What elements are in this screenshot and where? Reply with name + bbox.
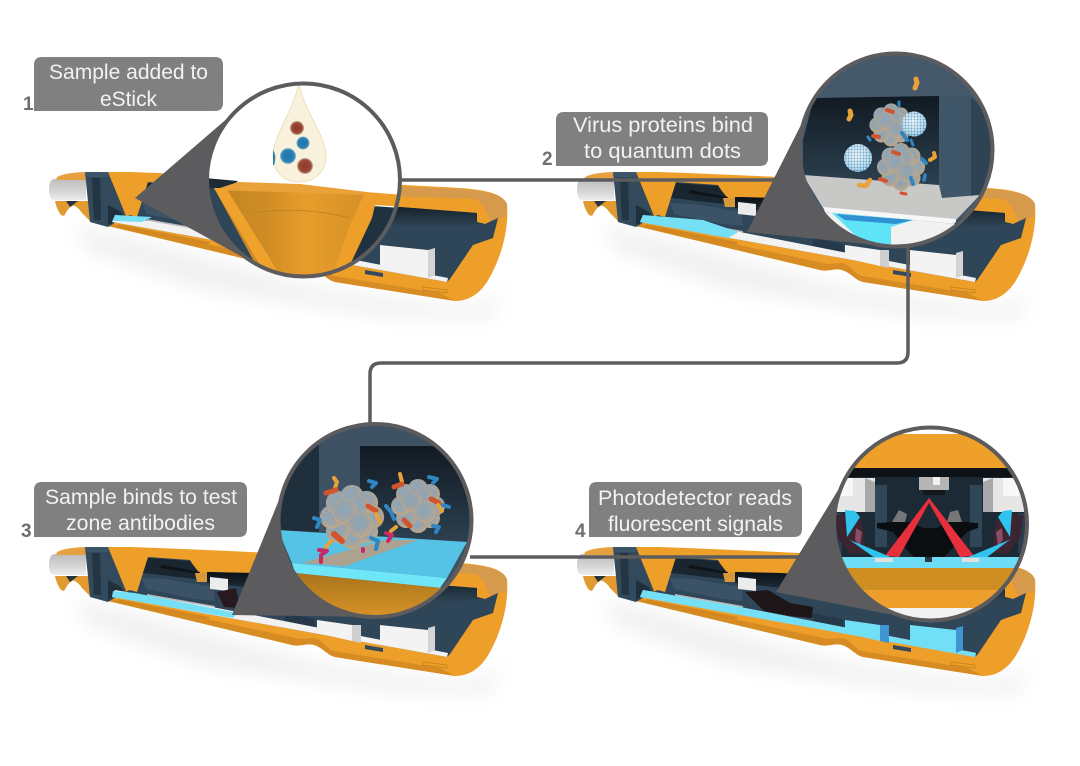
central optics — [877, 522, 978, 558]
step number 1: 1 — [23, 94, 34, 115]
magnifier wedge 1 — [135, 107, 257, 265]
panel: step 2 device — [577, 172, 1048, 320]
test strip blue section 2 — [640, 215, 738, 238]
test strip blue section 3 — [112, 591, 237, 618]
label: step 3 — [34, 482, 247, 537]
white blocks 2 — [845, 245, 963, 278]
white block 1 — [380, 245, 435, 278]
connector lines between steps — [370, 180, 908, 557]
test strip blue section 4 — [640, 590, 976, 657]
magnifier 2: proteins bind quantum dots — [796, 50, 996, 250]
panel: step 4 device — [577, 547, 1048, 695]
blue excitation beams — [845, 510, 1012, 558]
virus clusters — [869, 103, 913, 147]
pathogen particles — [273, 121, 313, 174]
device cutaway 1 — [49, 172, 520, 320]
red fluorescence beams — [885, 498, 974, 557]
label: step 4 — [589, 482, 802, 537]
label: step 4: fluorescent signals — [608, 513, 783, 536]
antibodies — [314, 474, 449, 562]
side emitters — [833, 478, 1024, 512]
blue blocks 4 — [845, 620, 963, 653]
magnifier 4: photodetector optics — [830, 426, 1030, 626]
label: step 3: Sample binds to test — [45, 486, 237, 509]
magnifier wedge 2 — [747, 107, 887, 246]
white blocks 3 — [317, 620, 435, 653]
detector — [919, 477, 949, 495]
label: step 4: Photodetector reads — [598, 487, 792, 510]
device cutaway 4 — [577, 547, 1048, 695]
label: step 1: eStick — [100, 88, 157, 111]
device cutaway 3 — [49, 547, 520, 695]
magnifier wedge 3 — [232, 484, 374, 617]
step number 2: 2 — [542, 149, 553, 170]
magnifier wedge 4 — [776, 474, 912, 619]
label: step 2: Virus proteins bind — [573, 114, 753, 137]
reagent clump 3 — [217, 588, 240, 608]
step number 4: 4 — [575, 521, 586, 542]
label: step 3: zone antibodies — [66, 512, 215, 535]
step number 3: 3 — [21, 521, 32, 542]
device cutaway 2 — [577, 172, 1048, 320]
test strip blue section 1 — [113, 215, 152, 222]
magnifier 1: drop over funnel — [205, 80, 405, 282]
free and bound proteins — [849, 79, 935, 194]
panel: step 1 device — [49, 172, 520, 320]
label: step 1 — [34, 57, 223, 111]
magnifier 3: binding to test zone antibodies — [278, 423, 473, 622]
label: step 1: Sample added to — [49, 61, 208, 84]
label: step 2: to quantum dots — [584, 140, 741, 163]
maroon reagent — [835, 512, 1023, 554]
panel: step 3 device — [49, 547, 520, 695]
quantum dots — [844, 112, 926, 172]
virus clusters — [391, 479, 445, 533]
label: step 2 — [556, 112, 768, 166]
reagent clump 4 — [745, 590, 813, 618]
liquid drop — [273, 80, 326, 182]
